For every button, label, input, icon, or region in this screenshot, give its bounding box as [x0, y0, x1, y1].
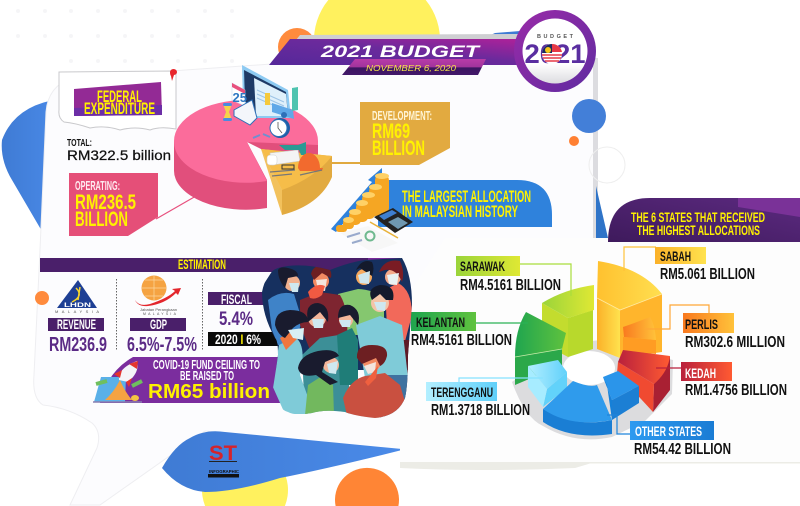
label: terengganu: RM1.3718 BILLION: [431, 402, 530, 419]
label: kedah: KEDAH: [685, 365, 716, 381]
estimation band: [40, 257, 400, 272]
callout: development: RM69: [372, 120, 410, 143]
person: back man in green: [338, 261, 384, 335]
decorative shape: yellow circle bottom: [202, 447, 288, 506]
donut chart: state allocations: [512, 261, 673, 439]
icon: LHDN logo: [55, 280, 99, 314]
icon: LHDN logo: LHDN: [64, 303, 91, 309]
budget 2021 badge: BUDGET: [537, 34, 574, 40]
callout line: development: [331, 162, 362, 164]
covid fund banner: COVID-19 FUND CEILING TO: [153, 358, 260, 372]
decorative shape: blue blob left: [2, 99, 60, 245]
fiscal column: FISCAL: [221, 291, 252, 307]
person: woman in blue: [268, 267, 302, 345]
callout: development: DEVELOPMENT:: [372, 109, 432, 123]
flag globe: [542, 44, 562, 64]
total label: RM322.5 billion: [67, 147, 171, 163]
estimation band: ESTIMATION: [178, 257, 226, 272]
note: federal expenditure: FEDERAL: [97, 87, 142, 106]
person: man in dark red: [300, 266, 347, 350]
right paper: [400, 238, 800, 462]
heading band: [74, 82, 162, 116]
callout: operating: OPERATING:: [75, 179, 120, 193]
fiscal column: 5.4%: [219, 309, 253, 330]
icon: LHDN logo: MALAYSIA: [55, 309, 99, 314]
icon: growth coins and calculator: [331, 168, 413, 252]
person: man in red sweater: [343, 345, 406, 420]
decorative circle: small orange left: [35, 291, 49, 305]
dark backdrop: [260, 255, 412, 370]
date ribbon: [342, 59, 486, 75]
revenue column: REVENUE: [57, 316, 96, 332]
label: other states: RM54.42 BILLION: [634, 441, 731, 458]
decorative shape: orange circle top: [278, 28, 316, 66]
main speech bubble paper: [34, 58, 596, 505]
covid fund banner: BE RAISED TO: [180, 369, 234, 383]
label: sarawak: RM4.5161 BILLION: [460, 277, 561, 294]
banner: largest allocation: THE LARGEST ALLOCATION: [402, 188, 531, 206]
label: kelantan: [411, 312, 528, 349]
callout: operating: [69, 173, 158, 236]
callout line: operating: [156, 196, 196, 219]
paper shadow: [400, 462, 800, 470]
covid fund banner: [93, 357, 285, 403]
label: terengganu: TERENGGANU: [431, 384, 493, 400]
alarm clock: [270, 118, 290, 138]
label: other states: [607, 415, 731, 458]
fiscal column: [208, 291, 280, 347]
logo: ST infographic: INFOGRAPHIC: [209, 469, 240, 474]
pie chart: expenditure: [174, 100, 332, 215]
icon: dashboard, calendar, hourglass and clock: 25: [232, 90, 247, 105]
dashboard window: [242, 65, 291, 118]
person: bottom woman in green: [298, 350, 339, 415]
chart paper: [340, 226, 398, 252]
callout: development: BILLION: [372, 137, 425, 160]
person: curly woman in pale blue: [272, 310, 314, 414]
title ribbon: [269, 34, 525, 75]
donut shadow ring: [512, 340, 673, 439]
pie slice: development: [261, 149, 332, 215]
revenue column: [48, 280, 107, 356]
decorative ring: [589, 147, 625, 183]
pencil: [370, 222, 398, 238]
GDP column: [127, 276, 197, 356]
title text: 2021 BUDGET: [320, 42, 481, 61]
calculator: [374, 208, 413, 233]
banner: largest allocation: [378, 180, 552, 227]
revenue column: RM236.9: [49, 334, 107, 356]
decorative circle: blue: [572, 99, 606, 133]
segment: kelantan: [515, 312, 566, 385]
label: sabah: RM5.061 BILLION: [660, 266, 755, 283]
icon: dashboard, calendar, hourglass and clock: [223, 65, 298, 138]
dotted divider: [116, 279, 118, 351]
label: perlis: [645, 305, 785, 351]
GDP column: GDP: [150, 316, 167, 332]
pens: [253, 134, 270, 138]
decorative shape: blue triangle right: [596, 186, 608, 238]
budget 2021 badge: [514, 10, 596, 92]
callout: operating: BILLION: [75, 208, 128, 231]
note: federal expenditure: EXPENDITURE: [84, 100, 155, 118]
fiscal column: 2020 I 6%: [215, 332, 261, 347]
icon: globe logo: [135, 276, 181, 316]
background dots: [16, 9, 234, 63]
label: perlis: PERLIS: [685, 316, 718, 332]
total label: TOTAL:: [67, 138, 92, 149]
label: sabah: [624, 247, 755, 283]
covid fund banner: RM65 billion: [148, 381, 270, 403]
decorative circle: small orange: [569, 136, 579, 146]
banner: largest allocation: IN MALAYSIAN HISTORY: [402, 203, 518, 221]
person: far right woman: [379, 260, 412, 400]
icon: globe logo: MALAYSIA: [143, 312, 177, 316]
decorative shape: blue bottom band: [162, 431, 402, 492]
icon: rocket and laptop: [93, 361, 142, 402]
segment: kedah: [617, 350, 670, 412]
label: sarawak: [456, 256, 571, 296]
label: kedah: [656, 362, 787, 399]
icon: globe logo: Jabatan Perangkaan: [140, 307, 177, 312]
decorative shape: blue triangle top right: [480, 31, 520, 40]
segment: perlis: [623, 317, 656, 354]
segment: sarawak: [542, 285, 594, 357]
segment: other states: [543, 371, 639, 436]
paper right edge fold: [593, 58, 598, 238]
label: sarawak: SARAWAK: [460, 258, 505, 274]
red pin: [170, 69, 177, 81]
logo: ST infographic: ST: [209, 442, 237, 465]
icon: hand tools and helmet: [267, 142, 323, 176]
segment: sabah: [597, 261, 662, 358]
segment: terengganu: [528, 360, 567, 407]
date ribbon: NOVEMBER 6, 2020: [366, 63, 456, 73]
illustration: masked crowd: [260, 255, 412, 420]
label: terengganu: [426, 378, 543, 419]
callout: operating: RM236.5: [75, 191, 136, 214]
dotted divider: [202, 279, 204, 351]
logo: ST infographic: [208, 442, 240, 478]
label: kelantan: RM4.5161 BILLION: [411, 332, 512, 349]
person: man in light teal: [356, 285, 410, 420]
label: other states: OTHER STATES: [635, 423, 702, 439]
hourglass: [223, 104, 232, 120]
budget 2021 badge: 2021: [524, 39, 586, 69]
decorative shape: orange circle bottom: [335, 468, 399, 506]
header: six states: [608, 198, 800, 242]
GDP column: 6.5%-7.5%: [127, 334, 197, 356]
label: kelantan: KELANTAN: [416, 314, 465, 330]
decorative shape: yellow circle top: [314, 0, 440, 103]
label: sabah: SABAH: [660, 248, 691, 264]
callout: development: [360, 102, 450, 165]
person: centre woman in teal: [302, 303, 350, 415]
total label: [67, 138, 171, 163]
note: federal expenditure: [59, 69, 177, 130]
person: woman dark teal: [337, 305, 359, 385]
calendar: [232, 83, 245, 106]
